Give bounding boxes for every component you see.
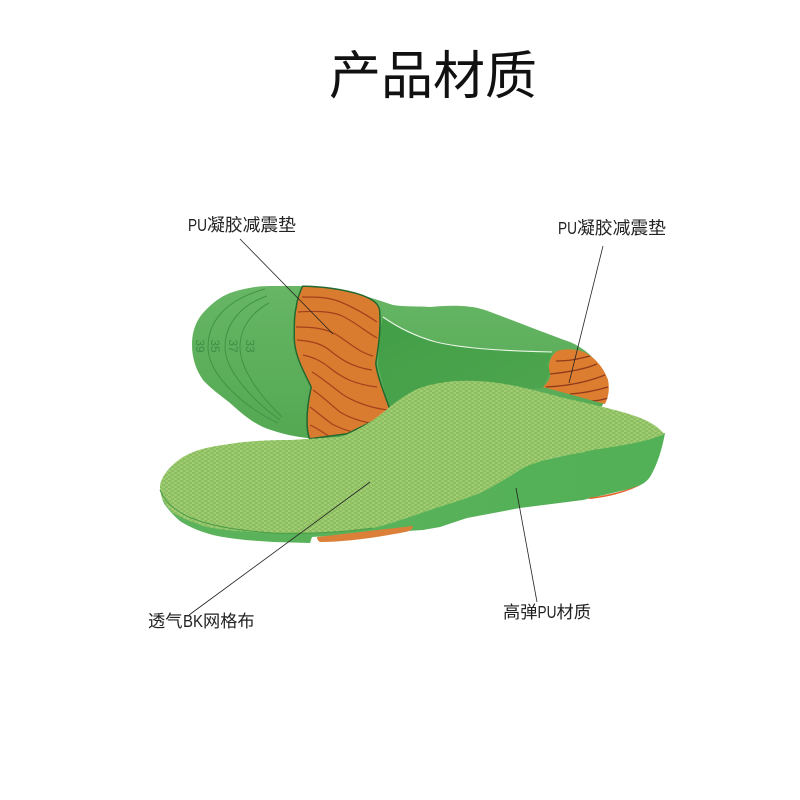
size numbers: 37 — [226, 339, 240, 353]
size ridges — [208, 289, 282, 423]
label: PU body — [503, 602, 591, 622]
arch highlight — [383, 317, 552, 352]
leader line: forefoot gel pad — [569, 246, 603, 383]
heel orange sliver — [588, 485, 640, 499]
leader line: heel gel pad — [240, 239, 333, 334]
label: mesh fabric: 透气 — [148, 611, 182, 631]
mesh top surface — [160, 381, 664, 533]
infographic canvas — [148, 50, 666, 628]
forefoot gel pad — [543, 349, 609, 404]
label: heel gel pad: 凝胶减震垫 — [207, 215, 296, 235]
arch side wall — [378, 317, 553, 412]
label: heel gel pad: PU — [188, 215, 207, 235]
label: mesh fabric — [148, 611, 255, 631]
side band — [160, 433, 665, 543]
size numbers: 33 — [243, 339, 257, 353]
size numbers — [193, 339, 257, 353]
leader line: mesh fabric — [189, 482, 370, 615]
heel gel pad — [294, 286, 390, 439]
size numbers: 39 — [193, 339, 207, 353]
size numbers: 35 — [208, 339, 222, 353]
label: forefoot gel pad: PU — [558, 218, 577, 238]
label: PU body: 材质 — [556, 602, 591, 622]
forefoot orange sliver — [317, 526, 413, 542]
insole body — [192, 286, 608, 440]
label: mesh fabric: BK — [183, 611, 203, 631]
leader line: PU body — [516, 488, 537, 602]
front insole, top view — [160, 381, 665, 543]
label: PU body: PU — [538, 602, 556, 622]
title: 产品材质 — [329, 48, 537, 106]
label: forefoot gel pad: 凝胶减震垫 — [577, 218, 666, 238]
label: mesh fabric: 网格布 — [203, 611, 255, 631]
label: PU body: 高弹 — [503, 602, 537, 622]
back insole, underside view — [192, 280, 609, 445]
mesh inner shadow edge — [160, 490, 373, 533]
